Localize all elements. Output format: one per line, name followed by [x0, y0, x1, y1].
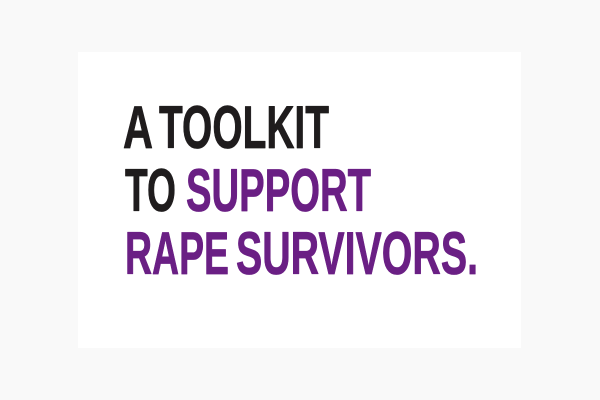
title line 2 [125, 157, 371, 224]
title [123, 94, 478, 287]
title line 3 [125, 220, 478, 287]
title line 3: RAPE [125, 220, 229, 287]
title line 1 [123, 94, 329, 161]
title line 2: SUPPORT [186, 157, 371, 224]
title line 2: TO [125, 157, 176, 224]
panel: white card [78, 52, 521, 348]
title line 1: A [123, 94, 153, 161]
title line 1: TOOLKIT [159, 94, 329, 161]
title line 3: SURVIVORS. [236, 220, 478, 287]
